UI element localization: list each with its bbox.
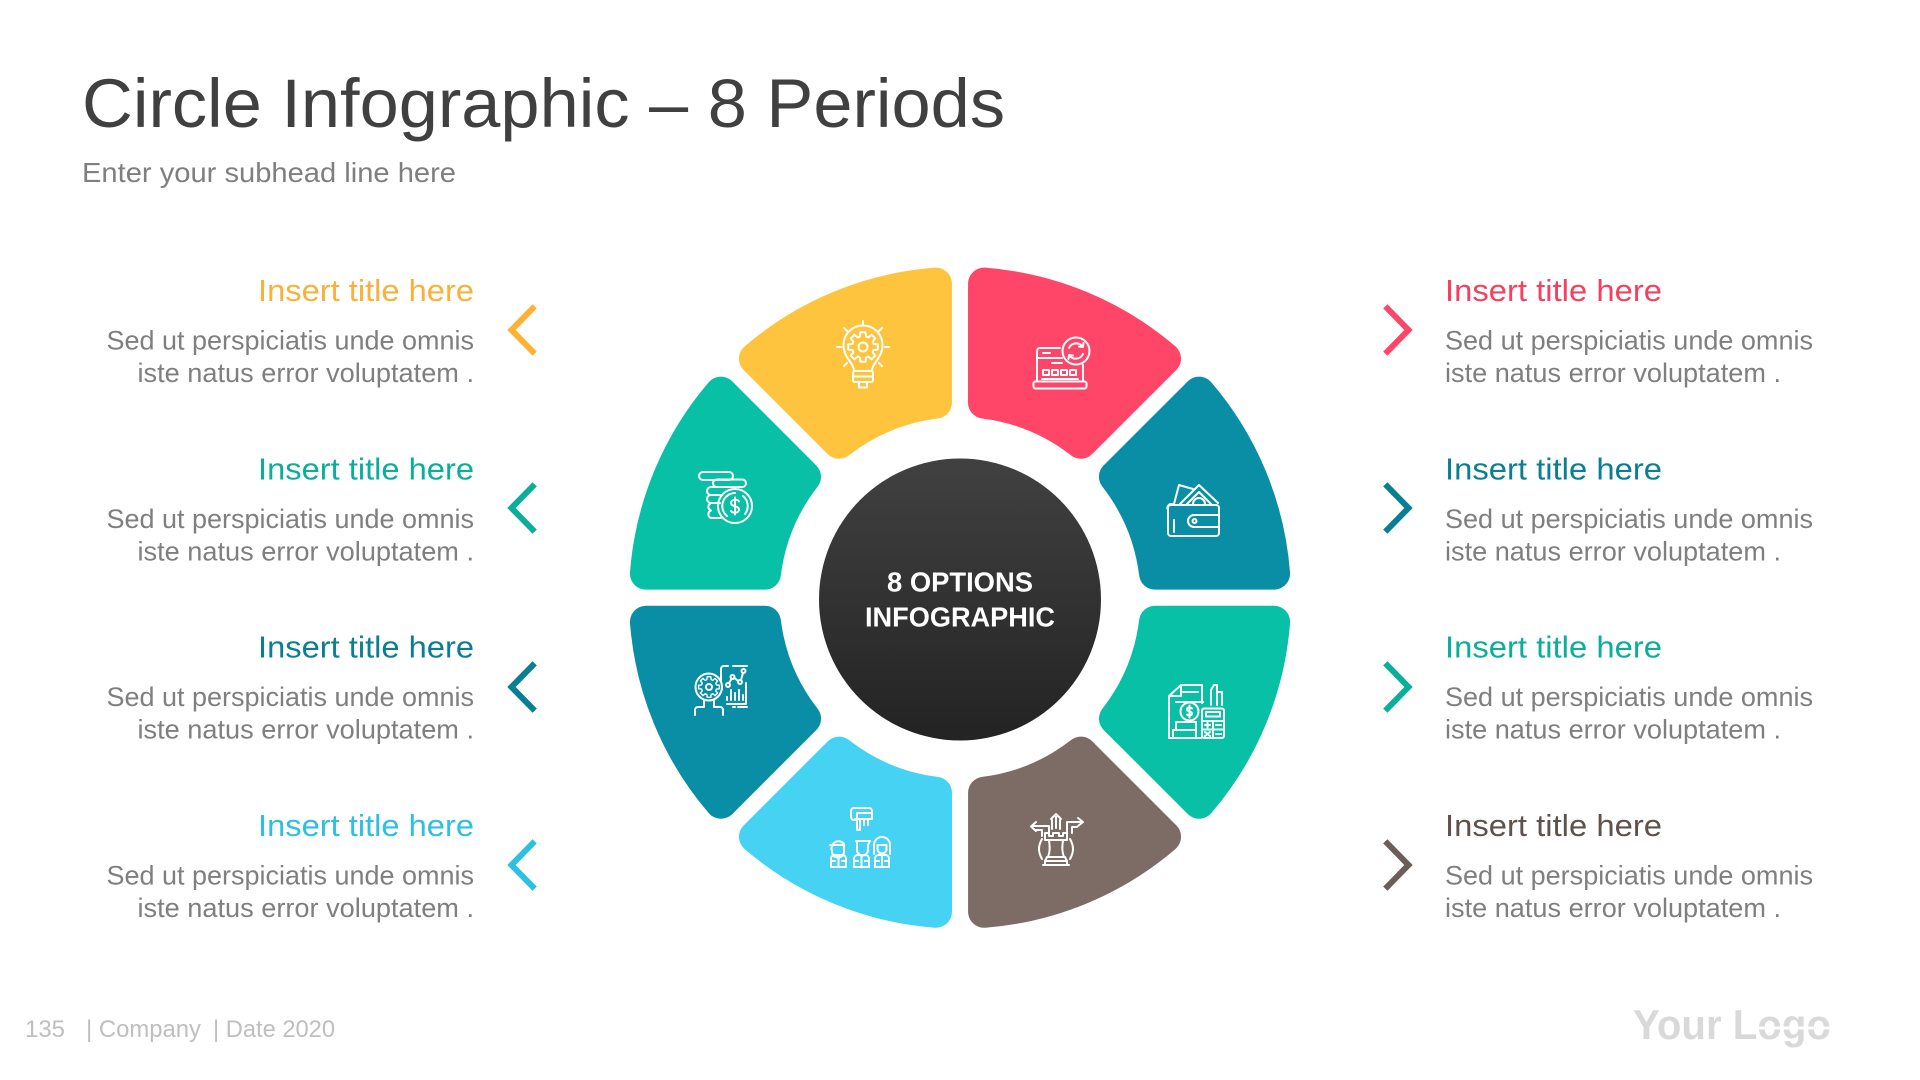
arrow: sky [512, 841, 535, 889]
segment: brown [925, 724, 1165, 965]
option text: sky: Insert title here [258, 808, 474, 843]
option text: green: Sed ut perspiciatis unde omnis [106, 504, 474, 534]
option text: sky: Sed ut perspiciatis unde omnis [106, 860, 474, 890]
arrow: blue [1385, 484, 1408, 532]
option text: green [106, 452, 474, 566]
icon: coin stacks with dollar [699, 472, 752, 523]
segment: green lower right [1115, 622, 1274, 803]
option text: green: Insert title here [258, 452, 474, 486]
segment: dark teal lower left [593, 562, 833, 803]
segment: pink [984, 284, 1165, 443]
arrow: green [512, 484, 535, 532]
option text: green: Insert title here [1445, 630, 1662, 664]
icon: light bulb with gear [837, 321, 889, 388]
option text: yellow [106, 273, 474, 388]
footer: page number, company and date [25, 1016, 335, 1043]
option text: blue: iste natus error voluptatem . [1445, 536, 1781, 566]
option text: pink: Sed ut perspiciatis unde omnis [1445, 326, 1813, 356]
icon: chess rook with arrows [1031, 814, 1083, 865]
option text: pink: Insert title here [1445, 273, 1662, 308]
title: Circle Infographic – 8 Periods [82, 65, 1005, 142]
option text: pink [1445, 273, 1813, 388]
arrow: blue [512, 663, 535, 711]
option text: blue: Sed ut perspiciatis unde omnis [1445, 504, 1813, 534]
option text: green [1445, 630, 1813, 744]
segment: sky blue [755, 753, 936, 912]
arrow: yellow [512, 306, 535, 354]
icon: laptop with refresh [1034, 338, 1090, 388]
option text: yellow: Insert title here [258, 273, 474, 308]
option text: brown: iste natus error voluptatem . [1445, 893, 1781, 923]
option text: blue [1445, 452, 1813, 566]
option text: sky [106, 808, 474, 923]
center circle [819, 458, 1101, 740]
footer: page number, company and date: | Date 2020 [213, 1016, 335, 1043]
segment: dark teal upper right [1087, 393, 1327, 633]
option text: blue: iste natus error voluptatem . [138, 714, 474, 744]
option text: yellow: iste natus error voluptatem . [138, 358, 474, 388]
option text: blue: Insert title here [258, 630, 474, 664]
icon: head with gear and growth chart [695, 666, 747, 715]
icon: invoice with calculator [1169, 685, 1224, 738]
icon: people with paint roller [830, 808, 890, 867]
panel: right option list [1385, 273, 1813, 923]
arrow: pink [1385, 306, 1408, 354]
option text: brown: Sed ut perspiciatis unde omnis [1445, 860, 1813, 890]
option text: green: iste natus error voluptatem . [1445, 714, 1781, 744]
option text: sky: iste natus error voluptatem . [138, 893, 474, 923]
option text: brown: Insert title here [1445, 808, 1662, 843]
option text: brown [1445, 808, 1813, 923]
option text: yellow: Sed ut perspiciatis unde omnis [106, 326, 474, 356]
option text: blue: Sed ut perspiciatis unde omnis [106, 682, 474, 712]
segment: yellow [755, 231, 995, 471]
option text: green: iste natus error voluptatem . [138, 536, 474, 566]
icon: wallet with banknotes [1167, 485, 1219, 536]
option text: blue: Insert title here [1445, 452, 1662, 486]
option text: green: Sed ut perspiciatis unde omnis [1445, 682, 1813, 712]
subhead: Enter your subhead line here [82, 157, 456, 188]
option text: blue [106, 630, 474, 744]
arrow: green [1385, 663, 1408, 711]
segment: green upper left [646, 393, 805, 574]
footer: page number, company and date: 135 [25, 1016, 65, 1043]
logo placeholder: Your Logo [1633, 1001, 1831, 1048]
center circle: INFOGRAPHIC [865, 602, 1055, 632]
chart: circular ring of 8 segments [593, 231, 1327, 965]
footer: page number, company and date: | Company [86, 1016, 201, 1043]
arrow: brown [1385, 841, 1408, 889]
option text: pink: iste natus error voluptatem . [1445, 358, 1781, 388]
panel: left option list [106, 273, 535, 923]
center circle: 8 OPTIONS [887, 566, 1033, 598]
